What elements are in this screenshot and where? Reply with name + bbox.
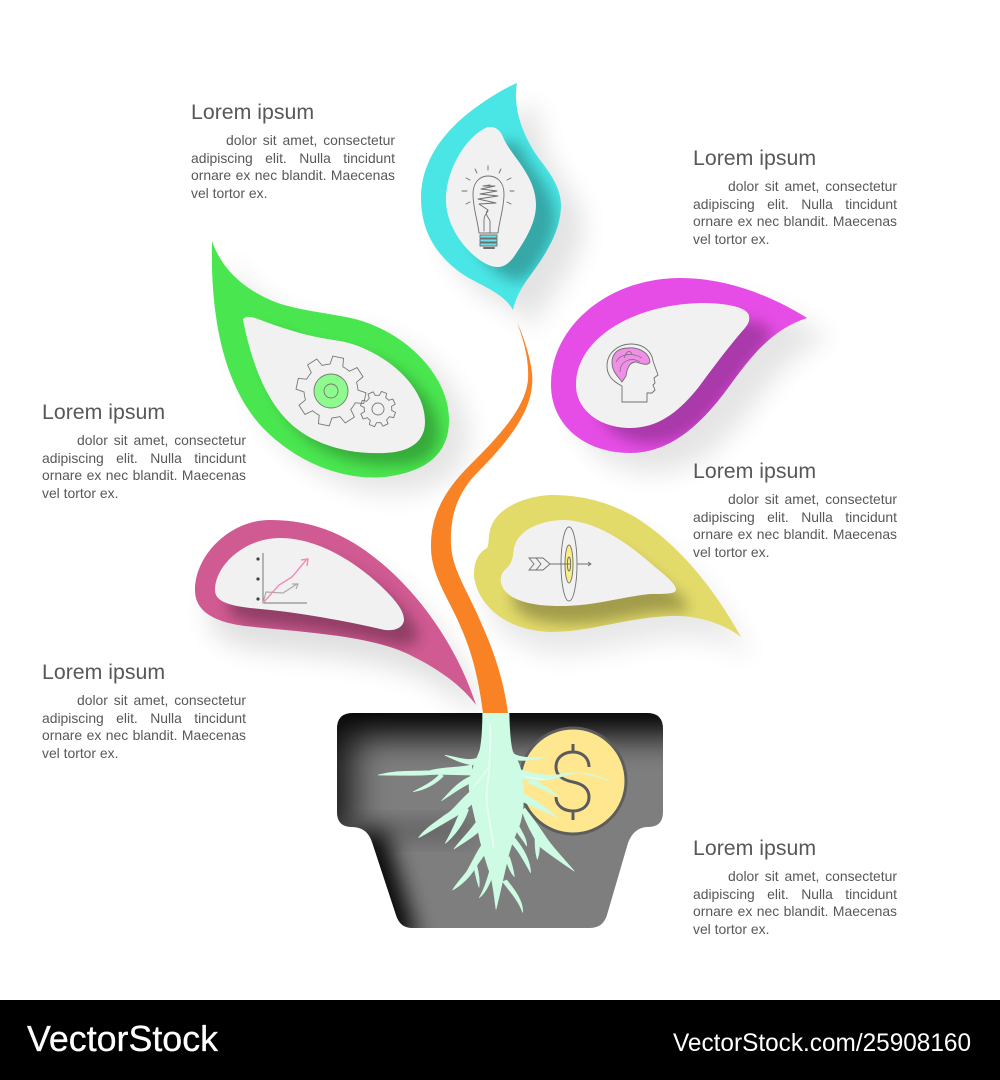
icon: gears	[290, 350, 401, 432]
text block: lower left	[42, 660, 246, 761]
leaf: cyan with light bulb	[421, 83, 583, 330]
text block: lower right: Lorem ipsum	[693, 836, 816, 860]
text block: middle left: dolor sit amet, consectetur	[77, 432, 246, 448]
text block: top left	[191, 100, 395, 201]
text block: lower right: adipiscing elit. Nulla tincidunt	[693, 886, 897, 902]
text block: middle right: Lorem ipsum	[693, 459, 816, 483]
text block: top left: dolor sit amet, consectetur	[226, 132, 395, 148]
icon: dollar coin	[520, 728, 626, 834]
text block: top right: adipiscing elit. Nulla tincidunt	[693, 196, 897, 212]
leaf: green with gears	[212, 241, 469, 493]
text block: lower left: dolor sit amet, consectetur	[77, 692, 246, 708]
text block: lower right: ornare ex nec blandit. Maecenas	[693, 903, 897, 919]
text block: top right: Lorem ipsum	[693, 146, 816, 170]
text block: top left: adipiscing elit. Nulla tincidunt	[191, 150, 395, 166]
text block: middle right: adipiscing elit. Nulla tincidunt	[693, 509, 897, 525]
roots	[378, 713, 609, 912]
text block: top right	[693, 146, 897, 247]
text block: lower left: Lorem ipsum	[42, 660, 165, 684]
text block: middle right: vel tortor ex.	[693, 544, 769, 560]
text block: lower left: ornare ex nec blandit. Maecenas	[42, 727, 246, 743]
text block: top right: dolor sit amet, consectetur	[728, 178, 897, 194]
text block: middle left: adipiscing elit. Nulla tincidunt	[42, 450, 246, 466]
icon: target with arrow	[529, 527, 591, 601]
icon: head with brain	[607, 344, 658, 402]
text block: top left: vel tortor ex.	[191, 185, 267, 201]
text block: middle right: dolor sit amet, consectetur	[728, 491, 897, 507]
leaf: pink with chart	[194, 520, 482, 711]
text block: lower left: adipiscing elit. Nulla tincidunt	[42, 710, 246, 726]
text block: middle right: ornare ex nec blandit. Maecenas	[693, 526, 897, 542]
icon: line chart	[256, 553, 308, 603]
icon: light bulb	[462, 166, 514, 248]
text block: lower right: vel tortor ex.	[693, 921, 769, 937]
text block: middle left: vel tortor ex.	[42, 485, 118, 501]
leaf: magenta with brain	[551, 278, 831, 473]
text block: lower right	[693, 836, 897, 937]
text block: top left: Lorem ipsum	[191, 100, 314, 124]
text block: top right: ornare ex nec blandit. Maecenas	[693, 213, 897, 229]
flower pot	[337, 713, 663, 928]
text block: middle left: ornare ex nec blandit. Maecenas	[42, 467, 246, 483]
watermark bar: VectorStock.com/25908160	[673, 1029, 971, 1057]
watermark bar: VectorStock	[27, 1018, 219, 1059]
text block: middle right	[693, 459, 897, 560]
text block: lower right: dolor sit amet, consectetur	[728, 868, 897, 884]
text block: lower left: vel tortor ex.	[42, 745, 118, 761]
text block: top right: vel tortor ex.	[693, 231, 769, 247]
text block: middle left	[42, 400, 246, 501]
watermark bar	[0, 1000, 1000, 1080]
text block: top left: ornare ex nec blandit. Maecenas	[191, 167, 395, 183]
leaf: yellow with target	[474, 495, 753, 659]
text block: middle left: Lorem ipsum	[42, 400, 165, 424]
stem	[431, 322, 532, 713]
